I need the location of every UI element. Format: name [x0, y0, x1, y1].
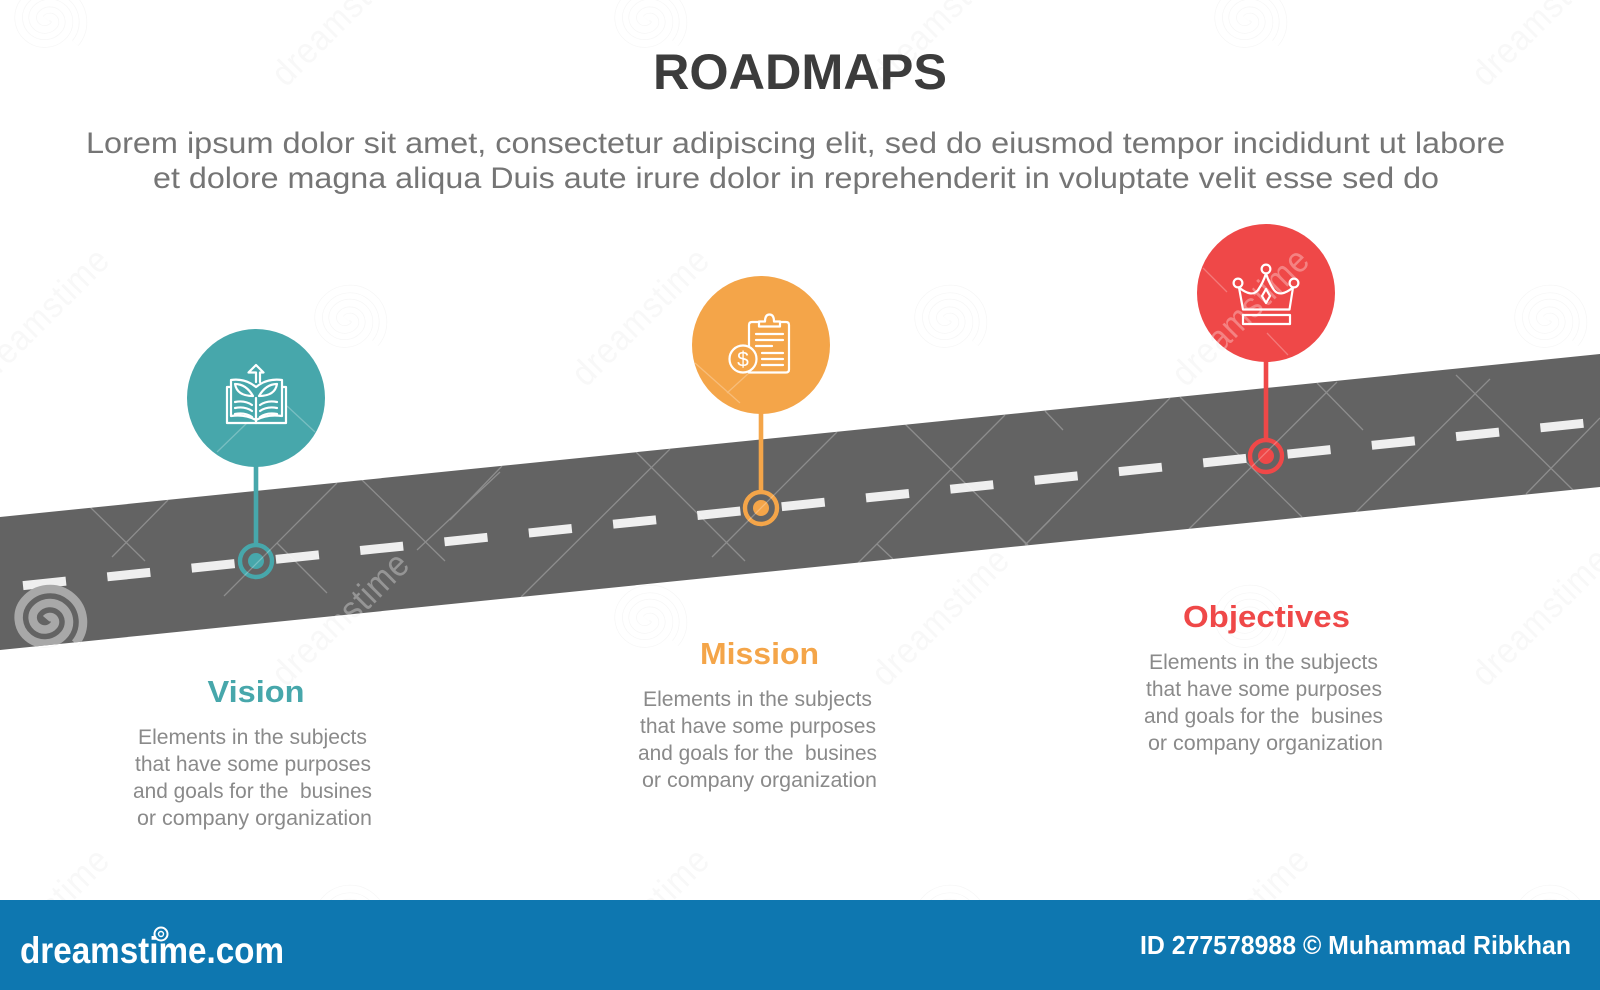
- vision description: [133, 725, 372, 830]
- objectives description: [1144, 650, 1383, 755]
- vision description: or company organization: [137, 806, 372, 830]
- mission road pin: [745, 492, 777, 524]
- marker: mission: [692, 276, 830, 524]
- icon: clipboard with coin: $: [737, 348, 749, 372]
- objectives description: or company organization: [1148, 731, 1383, 755]
- subtitle text block: [86, 127, 1505, 195]
- faint background watermark: dreamstime: [863, 539, 1018, 694]
- icon: open book with sprout: [227, 365, 286, 423]
- mission description: and goals for the busines: [638, 741, 877, 765]
- faint background watermark: dreamstime: [1163, 239, 1318, 394]
- mission stem: [759, 407, 763, 493]
- vision description: that have some purposes: [135, 752, 371, 776]
- vision description: Elements in the subjects: [138, 725, 367, 749]
- objectives description: and goals for the busines: [1144, 704, 1383, 728]
- faint background watermark: dreamstime: [263, 539, 418, 694]
- objectives heading: Objectives: [1183, 599, 1350, 634]
- mission heading: Mission: [700, 636, 819, 671]
- footer background: [0, 900, 1600, 990]
- road centre dashes: [23, 423, 1583, 586]
- objectives road pin: [1250, 440, 1282, 472]
- faint background watermark: dreamstime: [1163, 839, 1318, 990]
- mission description: that have some purposes: [640, 714, 876, 738]
- icon: clipboard with coin: [730, 314, 789, 372]
- objectives stem: [1264, 355, 1268, 441]
- objectives circle: [1197, 224, 1335, 362]
- label block: objectives: [1144, 599, 1383, 755]
- road: [0, 354, 1600, 650]
- vision heading: Vision: [208, 674, 304, 709]
- mission description: or company organization: [642, 768, 877, 792]
- footer credit: ID 277578988 © Muhammad Ribkhan: [1140, 930, 1571, 960]
- subtitle text block: et dolore magna aliqua Duis aute irure dolor in reprehenderit in voluptate velit esse sed do: [153, 162, 1439, 195]
- faint background watermark: dreamstime: [563, 239, 718, 394]
- vision description: and goals for the busines: [133, 779, 372, 803]
- watermark lettering on road: [263, 239, 1318, 698]
- mission description: Elements in the subjects: [643, 687, 872, 711]
- watermark lettering on road: dreamstime: [263, 543, 418, 698]
- mission circle: [692, 276, 830, 414]
- icon: crown: [1234, 265, 1298, 324]
- road surface: [0, 354, 1600, 650]
- marker: objectives: [1197, 224, 1335, 472]
- title: ROADMAPS: [653, 44, 947, 100]
- objectives description: that have some purposes: [1146, 677, 1382, 701]
- watermark lettering on road: dreamstime: [1163, 239, 1318, 394]
- objectives description: Elements in the subjects: [1149, 650, 1378, 674]
- label block: mission: [638, 636, 877, 792]
- watermark overlay on road: [14, 253, 1600, 646]
- mission description: [638, 687, 877, 792]
- footer logo: dreamstime.com: [20, 930, 284, 971]
- vision circle: [187, 329, 325, 467]
- vision road pin: [240, 545, 272, 577]
- watermark spiral on road: [14, 584, 88, 646]
- vision stem: [254, 460, 258, 546]
- watermark cross lines: [90, 268, 1600, 597]
- label block: vision: [133, 674, 372, 830]
- faint background watermark: dreamstime: [563, 839, 718, 990]
- marker: vision: [187, 329, 325, 577]
- subtitle text block: Lorem ipsum dolor sit amet, consectetur adipiscing elit, sed do eiusmod tempor incididunt ut labore: [86, 127, 1505, 160]
- footer bar: [0, 900, 1600, 990]
